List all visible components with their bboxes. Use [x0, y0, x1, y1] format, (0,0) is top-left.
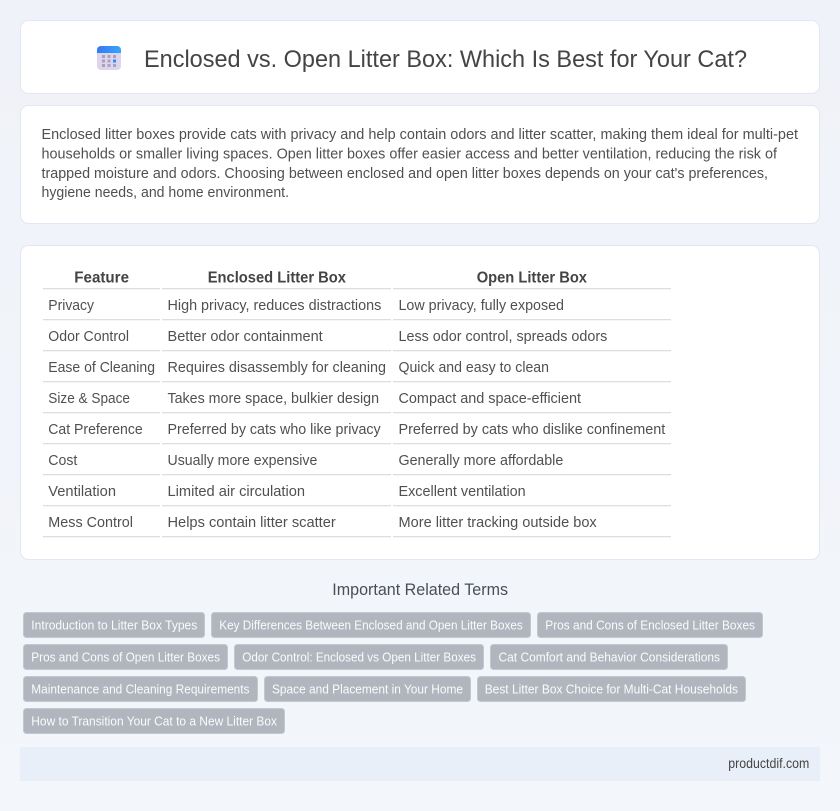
tag [234, 644, 484, 670]
row: ease of cleaning: Requires disassembly for cleaning [168, 360, 386, 376]
row: ventilation: Excellent ventilation [398, 484, 526, 500]
tag: Pros and Cons of Open Litter Boxes [31, 650, 220, 664]
panel: comparison table [20, 246, 820, 560]
tag: Introduction to Litter Box Types [31, 618, 197, 632]
row: odor control: Better odor containment [168, 329, 323, 345]
row: odor control: Odor Control [48, 329, 129, 345]
tag [24, 708, 284, 734]
row: cost [48, 453, 563, 469]
row: odor control [48, 329, 607, 345]
text block: introduction: Enclosed litter boxes provide cats with privacy and help contain odors and litter scatter, making them ideal for multi-pet [42, 126, 799, 143]
row: size and space: Size & Space [48, 391, 130, 407]
tag: Best Litter Box Choice for Multi-Cat Households [485, 682, 738, 696]
panel: title header [20, 20, 820, 94]
row: cat preference: Preferred by cats who dislike confinement [398, 422, 665, 438]
heading: important related terms: Important Related Terms [332, 581, 508, 599]
tag [264, 676, 470, 702]
title: Enclosed vs. Open Litter Box: Which Is Best for Your Cat? [144, 46, 747, 73]
icon: calendar [97, 46, 121, 70]
text block: introduction: trapped moisture and odors. Choosing between enclosed and open litter boxes depends on your cat's preferences, [42, 165, 768, 182]
table rules [43, 288, 671, 537]
tag [212, 612, 530, 638]
related terms tags [24, 612, 762, 734]
table header row: Open Litter Box [477, 270, 587, 287]
text block: introduction: households or smaller living spaces. Open litter boxes offer easier access and better ventilation, reducing the risk of [42, 145, 778, 162]
row: cost: Usually more expensive [168, 453, 317, 469]
tag: Space and Placement in Your Home [272, 682, 463, 696]
row: cat preference [48, 422, 665, 438]
row: ventilation [48, 484, 526, 500]
row: size and space [48, 391, 581, 407]
footer bar [20, 747, 820, 781]
row: size and space: Takes more space, bulkier design [168, 391, 379, 407]
table header row [74, 270, 587, 287]
row: ease of cleaning: Quick and easy to clean [398, 360, 549, 376]
text block: introduction [42, 126, 799, 201]
row: cost: Cost [48, 453, 77, 469]
row: privacy: Low privacy, fully exposed [398, 298, 564, 314]
table header row: Feature [74, 270, 129, 287]
tag [538, 612, 762, 638]
tag: Maintenance and Cleaning Requirements [31, 682, 249, 696]
panel: introduction text [20, 106, 820, 224]
tag [24, 612, 204, 638]
tag: Cat Comfort and Behavior Considerations [498, 650, 720, 664]
row: privacy [48, 298, 564, 314]
footer site name: productdif.com [728, 756, 809, 771]
row: ventilation: Limited air circulation [168, 484, 305, 500]
row: privacy: Privacy [48, 298, 95, 314]
row: cost: Generally more affordable [398, 453, 563, 469]
row: mess control [48, 515, 597, 531]
tag [490, 644, 728, 670]
tag: Key Differences Between Enclosed and Open Litter Boxes [219, 618, 523, 632]
row: privacy: High privacy, reduces distractions [168, 298, 381, 314]
tag: How to Transition Your Cat to a New Litter Box [31, 714, 278, 728]
text block: introduction: hygiene needs, and home environment. [42, 184, 289, 201]
row: ventilation: Ventilation [48, 484, 116, 500]
row: ease of cleaning: Ease of Cleaning [48, 360, 155, 376]
tag [24, 644, 228, 670]
tag [24, 676, 258, 702]
tag: Pros and Cons of Enclosed Litter Boxes [545, 618, 755, 632]
row: cat preference: Cat Preference [48, 422, 143, 438]
row: size and space: Compact and space-efficient [398, 391, 581, 407]
row: mess control: Mess Control [48, 515, 133, 531]
row: cat preference: Preferred by cats who like privacy [168, 422, 381, 438]
row: mess control: Helps contain litter scatter [168, 515, 336, 531]
row: odor control: Less odor control, spreads odors [398, 329, 607, 345]
table header row: Enclosed Litter Box [208, 270, 346, 287]
tag [478, 676, 746, 702]
row: ease of cleaning [48, 360, 549, 376]
row: mess control: More litter tracking outside box [398, 515, 597, 531]
tag: Odor Control: Enclosed vs Open Litter Boxes [242, 650, 476, 664]
